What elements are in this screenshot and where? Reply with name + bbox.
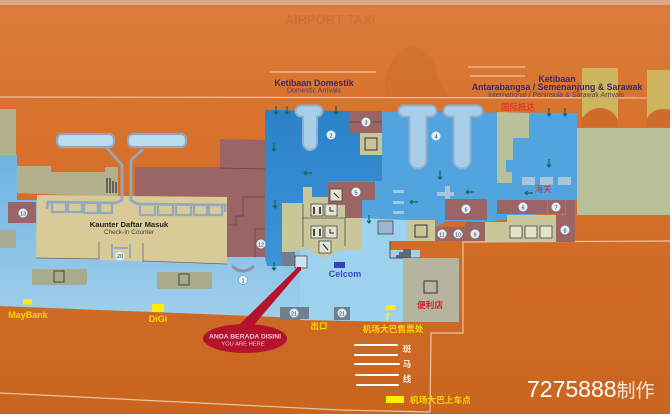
marker: airport bus stop xyxy=(386,394,471,405)
central lift box xyxy=(378,221,393,234)
room numbers 2 and 4 and 12 xyxy=(256,130,440,248)
shop block xyxy=(403,258,459,322)
arrivals piers international xyxy=(404,111,477,160)
stairs box xyxy=(390,241,421,258)
mauve offices left of arrivals xyxy=(135,139,266,257)
you are here pointer: YOU ARE HERE xyxy=(221,342,265,348)
gate 21 middle xyxy=(334,307,350,320)
mid blue international arrivals hall xyxy=(362,112,577,227)
marker: airport bus stop: 机场大巴上车点 xyxy=(410,394,471,405)
label: zebra crossing: 马 xyxy=(403,359,411,369)
marker 1 with curved stairs: 1 xyxy=(241,278,245,284)
rooms 11 10 9: 9 xyxy=(473,232,477,238)
heading: international arrivals: International / Peninsula & Sarawak Arrivals xyxy=(488,92,624,99)
marker: Celcom: Celcom xyxy=(329,269,361,279)
room 8 xyxy=(556,200,575,242)
room numbers 2 and 4 and 12: 12 xyxy=(258,242,264,248)
tan kiosk with lift icon 2 xyxy=(157,272,212,289)
room 5: 5 xyxy=(354,190,358,196)
olive tan block left of check-in xyxy=(17,166,118,197)
marker: DiGi xyxy=(149,304,167,324)
right toilets strip xyxy=(485,215,556,242)
heading: domestic arrivals: Domestic Arrivals xyxy=(287,88,342,94)
pale frosted blocks in arrivals hall xyxy=(393,177,571,214)
toilets block xyxy=(282,187,362,258)
marker: DiGi: DiGi xyxy=(149,314,167,324)
tan immigration block xyxy=(497,112,529,183)
far right tan zone xyxy=(577,128,670,215)
heading: check-in counter xyxy=(90,220,169,236)
gate 21 left: 21 xyxy=(291,312,297,318)
heading: international arrivals: Ketibaan xyxy=(538,74,576,84)
heading: domestic arrivals xyxy=(274,78,354,94)
heading: domestic arrivals: Ketibaan Domestik xyxy=(274,78,354,88)
counter 20: 20 xyxy=(117,254,123,260)
room 7 xyxy=(548,200,565,214)
room 3: 3 xyxy=(364,120,368,126)
room numbers 2 and 4 and 12: 4 xyxy=(434,134,438,140)
heading: check-in counter: Kaunter Daftar Masuk xyxy=(90,220,169,229)
heading: check-in counter: Check-In Counter xyxy=(104,229,155,236)
marker 1 with curved stairs xyxy=(232,266,254,284)
label: convenience store: 便利店 xyxy=(417,299,443,310)
toilet and accessibility icons xyxy=(311,189,342,253)
counter 20 xyxy=(112,244,130,260)
departure piers and gates xyxy=(47,134,225,215)
room 6 right xyxy=(497,200,547,214)
gate 21 left xyxy=(280,307,309,319)
stair and lift at here-marker xyxy=(282,252,307,268)
you are here pointer xyxy=(203,267,301,353)
reflected silhouette xyxy=(385,45,450,97)
rooms 11 10 9: 11 xyxy=(439,232,445,238)
panel: check-in counter hall xyxy=(36,195,227,264)
tan kiosk with lift icon 1 xyxy=(32,269,87,285)
bright public hall near lifts xyxy=(300,218,407,322)
left small block xyxy=(0,230,16,248)
label: customs Chinese: 海关 xyxy=(534,184,552,194)
gate 21 middle: 21 xyxy=(339,312,345,318)
you are here pointer: ANDA BERADA DISINI xyxy=(209,334,281,340)
left office 13: 13 xyxy=(20,212,26,218)
room 3 xyxy=(350,111,382,133)
heading: international arrivals xyxy=(472,74,642,99)
lift box tan xyxy=(407,220,435,241)
room 6 left: 6 xyxy=(464,208,468,214)
lift icon near room 3 xyxy=(360,133,382,155)
marker: MayBank xyxy=(8,299,49,320)
marker: airport bus ticket office: 机场大巴售票处 xyxy=(363,323,424,334)
baggage icon xyxy=(106,178,117,193)
left office 13 xyxy=(8,202,36,223)
main public floor xyxy=(0,155,407,322)
window reflection right xyxy=(647,70,670,127)
label: zebra crossing: 线 xyxy=(403,374,412,384)
marker: MayBank: MayBank xyxy=(8,310,49,320)
room 8: 8 xyxy=(563,228,567,234)
heading: international arrivals: Antarabangsa / Semenanjung & Sarawak xyxy=(472,82,642,92)
label: zebra crossing xyxy=(403,344,412,384)
watermark: 7275888制作 xyxy=(527,376,655,402)
green direction arrows xyxy=(272,106,567,270)
dark blue domestic arrivals hall xyxy=(265,110,382,266)
arrivals pier domestic xyxy=(301,111,317,143)
rooms 11 10 9 xyxy=(436,222,485,241)
marker: Celcom xyxy=(329,262,361,279)
room 6 left xyxy=(445,199,487,220)
room numbers 2 and 4 and 12: 2 xyxy=(329,134,333,140)
rooms 11 10 9: 10 xyxy=(455,232,461,238)
window reflection left xyxy=(582,68,618,127)
label: exit: 出口 xyxy=(310,321,328,331)
room 7: 7 xyxy=(554,206,558,212)
zebra crossing stripes xyxy=(355,345,399,385)
room 5 xyxy=(328,182,375,218)
room 6 right: 6 xyxy=(521,206,525,212)
marker: airport bus ticket office xyxy=(363,305,424,334)
left end tan block xyxy=(0,109,16,155)
label: zebra crossing: 斑 xyxy=(403,344,412,354)
reflected taxi sign: AIRPORT TAXI xyxy=(285,12,375,27)
label: international arrivals Chinese: 国际抵达 xyxy=(501,102,535,112)
